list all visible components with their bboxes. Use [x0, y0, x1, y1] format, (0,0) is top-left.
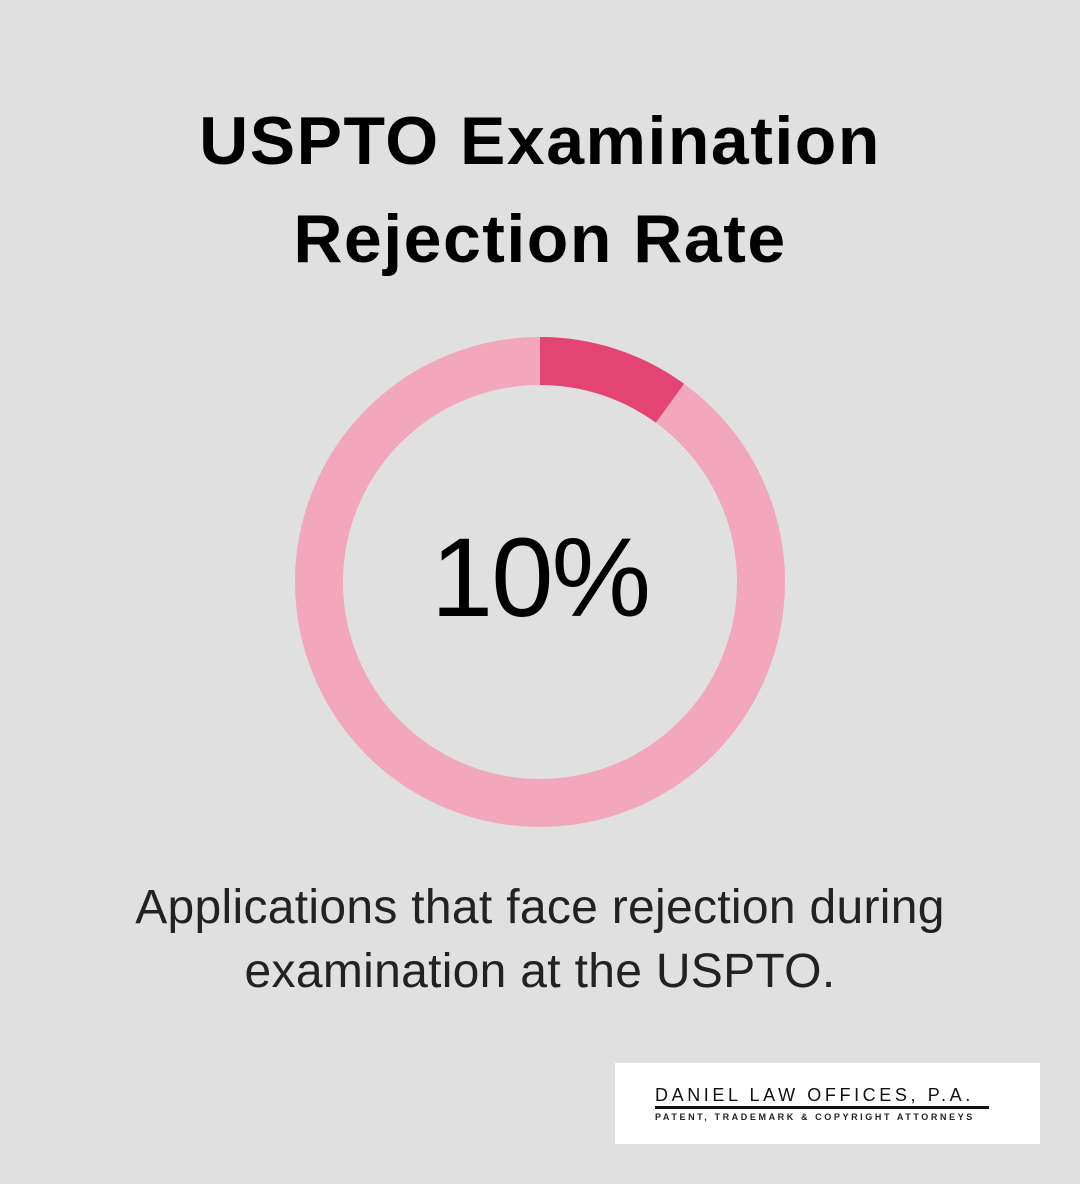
- logo: DANIEL LAW OFFICES, P.A.: [655, 1085, 974, 1105]
- logo: PATENT, TRADEMARK & COPYRIGHT ATTORNEYS: [655, 1112, 975, 1122]
- description text: examination at the USPTO.: [245, 945, 835, 998]
- description text: [135, 881, 945, 998]
- logo: [615, 1063, 1040, 1144]
- description text: Applications that face rejection during: [135, 881, 945, 934]
- title: USPTO Examination: [199, 103, 881, 179]
- title: Rejection Rate: [293, 201, 787, 277]
- title: [199, 103, 881, 277]
- percentage value: 10%: [431, 515, 649, 640]
